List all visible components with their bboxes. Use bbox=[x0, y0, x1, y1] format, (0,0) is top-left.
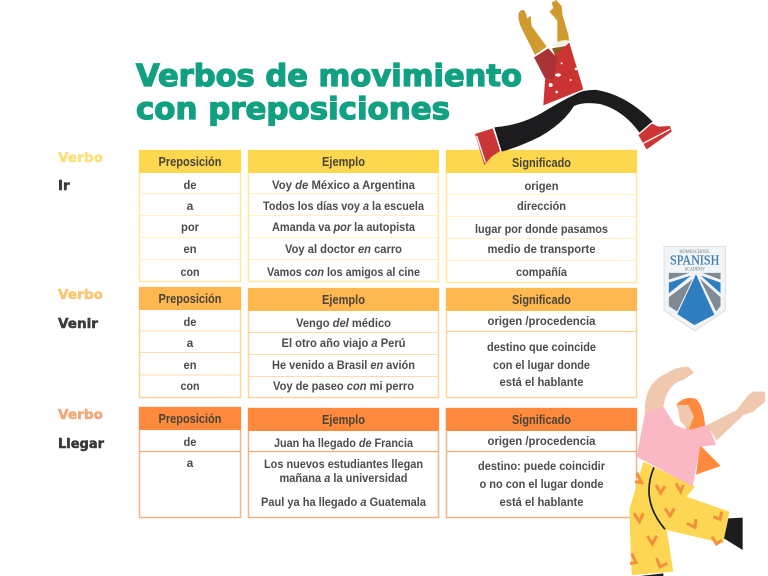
column: Significado Llegar: destino: puede coincidir bbox=[478, 459, 605, 473]
column: Ejemplo Ir: Todos los días voy a la escuela bbox=[263, 199, 424, 213]
column: Preposición Ir bbox=[139, 150, 241, 282]
column: Significado Venir: está el hablante bbox=[500, 375, 584, 389]
icon: dancing woman illustration bbox=[629, 367, 765, 576]
column: Significado Ir: lugar por donde pasamos bbox=[475, 222, 608, 236]
column: Ejemplo Ir bbox=[248, 150, 439, 282]
column: Preposición Venir: con bbox=[180, 379, 200, 393]
column: Ejemplo Venir: Voy de paseo con mi perro bbox=[273, 379, 414, 393]
column: Ejemplo Ir: Ejemplo bbox=[322, 155, 365, 169]
verb label: Venir: Verbo bbox=[58, 287, 103, 303]
column: Preposición Ir: a bbox=[187, 199, 194, 213]
table: Ir bbox=[139, 150, 637, 282]
verb label: Llegar bbox=[58, 407, 104, 452]
column: Preposición Llegar bbox=[139, 407, 241, 518]
column: Preposición Venir bbox=[139, 287, 241, 398]
column: Ejemplo Ir: Vamos con los amigos al cine bbox=[267, 265, 420, 279]
column: Ejemplo Llegar bbox=[248, 408, 439, 518]
column: Preposición Venir: en bbox=[184, 358, 196, 372]
column: Significado Venir bbox=[446, 288, 637, 398]
icon: Homeschool Spanish Academy logo: ACADEMY bbox=[684, 267, 705, 272]
column: Significado Ir: compañía bbox=[516, 265, 567, 279]
title: con preposiciones bbox=[136, 92, 450, 127]
column: Ejemplo Ir: Amanda va por la autopista bbox=[272, 220, 415, 234]
verb label: Llegar: Llegar bbox=[58, 436, 104, 452]
column: Preposición Venir: de bbox=[184, 315, 197, 329]
column: Significado Ir: origen bbox=[524, 179, 558, 193]
column: Ejemplo Venir bbox=[248, 288, 439, 398]
column: Significado Ir: Significado bbox=[512, 156, 571, 170]
icon: Homeschool Spanish Academy logo: SPANISH bbox=[670, 252, 720, 267]
column: Ejemplo Llegar: Juan ha llegado de Francia bbox=[274, 436, 413, 450]
column: Preposición Ir: por bbox=[181, 220, 199, 234]
icon: jumping man illustration bbox=[475, 0, 672, 165]
column: Significado Llegar: o no con el lugar donde bbox=[480, 477, 604, 491]
column: Preposición Ir: con bbox=[180, 265, 200, 279]
title bbox=[136, 59, 522, 127]
column: Ejemplo Venir: He venido a Brasil en avión bbox=[272, 358, 415, 372]
column: Significado Venir: origen /procedencia bbox=[488, 314, 596, 328]
column: Significado Llegar bbox=[446, 408, 637, 518]
column: Significado Venir: con el lugar donde bbox=[493, 358, 590, 372]
verb label: Llegar: Verbo bbox=[58, 407, 103, 423]
column: Significado Llegar: Significado bbox=[512, 413, 571, 427]
column: Ejemplo Venir: El otro año viajo a Perú bbox=[282, 336, 406, 350]
verb label: Venir: Venir bbox=[58, 316, 98, 332]
column: Significado Ir bbox=[446, 150, 637, 282]
column: Ejemplo Llegar: Ejemplo bbox=[322, 413, 365, 427]
table: Llegar bbox=[139, 407, 637, 518]
column: Ejemplo Llegar: Paul ya ha llegado a Guatemala bbox=[261, 495, 426, 509]
column: Preposición Llegar: de bbox=[184, 435, 197, 449]
column: Significado Venir: Significado bbox=[512, 293, 571, 307]
verb label: Ir bbox=[58, 150, 103, 194]
column: Ejemplo Llegar: mañana a la universidad bbox=[280, 471, 408, 485]
icon: Homeschool Spanish Academy logo: HOMESCHOOL bbox=[679, 249, 710, 255]
column: Preposición Ir: en bbox=[184, 242, 196, 256]
column: Ejemplo Ir: Voy de México a Argentina bbox=[272, 178, 415, 192]
icon: Homeschool Spanish Academy logo bbox=[664, 246, 725, 331]
verb label: Venir bbox=[58, 287, 103, 332]
column: Significado Ir: medio de transporte bbox=[488, 242, 596, 256]
column: Preposición Ir: Preposición bbox=[158, 155, 222, 169]
column: Significado Ir: dirección bbox=[517, 199, 566, 213]
column: Significado Llegar: está el hablante bbox=[500, 495, 584, 509]
column: Ejemplo Venir: Vengo del médico bbox=[296, 316, 391, 330]
column: Preposición Ir: de bbox=[184, 178, 197, 192]
column: Preposición Llegar: a bbox=[187, 456, 194, 470]
column: Significado Llegar: origen /procedencia bbox=[488, 434, 596, 448]
column: Preposición Venir: a bbox=[187, 336, 194, 350]
column: Ejemplo Ir: Voy al doctor en carro bbox=[285, 242, 402, 256]
column: Ejemplo Venir: Ejemplo bbox=[322, 293, 365, 307]
title: Verbos de movimiento bbox=[136, 59, 522, 94]
column: Preposición Venir: Preposición bbox=[158, 292, 222, 306]
verb label: Ir: Verbo bbox=[58, 150, 103, 166]
column: Ejemplo Llegar: Los nuevos estudiantes llegan bbox=[264, 457, 423, 471]
column: Significado Venir: destino que coincide bbox=[487, 340, 596, 354]
table: Venir bbox=[139, 287, 637, 398]
verb label: Ir: Ir bbox=[58, 178, 70, 194]
column: Preposición Llegar: Preposición bbox=[158, 412, 222, 426]
